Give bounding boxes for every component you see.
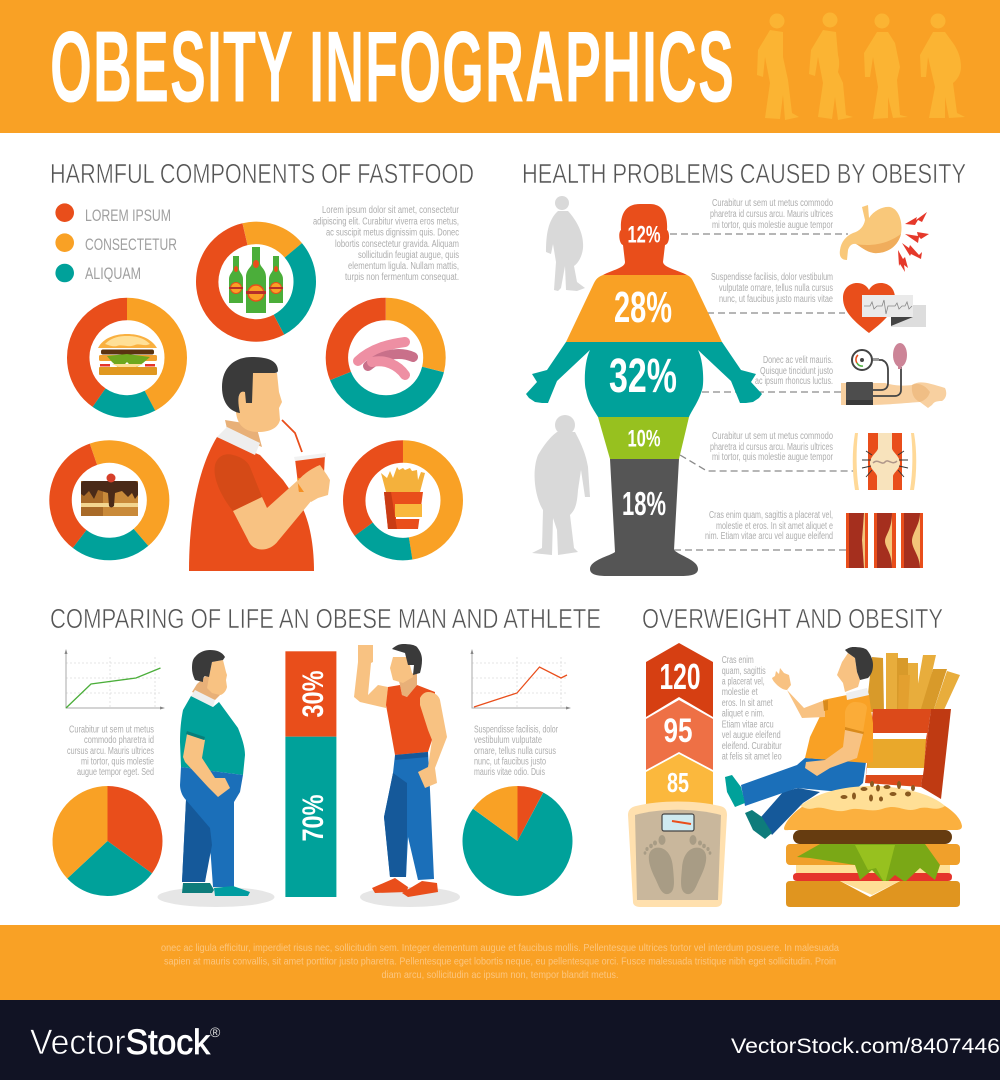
footer band: sapien at mauris convallis, sit amet porttitor justo pharetra. Pellentesque eget lobortis neque, eu pellentesque orci. Fusce malesuada tristique nibh eget sollicitudin. Proin [164,956,836,968]
stacked bar: 30% [297,670,330,718]
icon: sausages [358,342,413,375]
text block: heart: vulputate ornare, tellus nulla cursus [719,283,833,294]
text block: athlete: Suspendisse facilisis, dolor [474,724,558,736]
pie chart: obese man [69,802,146,880]
text block: athlete: mauris vitae odio. Duis [474,767,545,778]
footer band: onec ac ligula efficitur, imperdiet risus nec, sollicitudin sem. Integer elementum augue et faucibus mollis. Pellentesque ultrices tortor vel interdum posuere. In malesuada [161,942,839,954]
text block: athlete: nunc, ut faucibus justo [474,756,546,768]
text block: athlete [474,724,558,778]
text block: turpis non fermentum consequat. [345,272,459,283]
text block: at felis sit amet leo [722,752,782,762]
text block: a placerat vel, [722,676,765,688]
text block: stomach: pharetra id cursus arcu. Mauris ultrices [710,209,833,220]
panel: harmful components of fastfood [41,158,474,571]
header band [0,0,1000,133]
icon: blood pressure [841,343,946,408]
legend: ALIQUAM [85,265,141,283]
icon: bathroom scale [628,802,727,907]
donut chart: beer [187,213,325,350]
icon: beer bottles [229,247,283,313]
text block: ac suscipit metus dignissim quis. Donec [326,228,459,238]
body chart: 10% [628,426,660,452]
weight scale stack: 120 [660,656,700,697]
icon: heart with ecg [843,283,926,333]
icon: cake [81,474,138,516]
pie chart: athlete [479,803,556,879]
icon: arteries [846,513,923,568]
weight scale stack [646,643,713,807]
text block: pressure: Quisque tincidunt justo [760,366,833,377]
text block: obese man: commodo pharetra id [84,735,154,746]
text block: Etiam vitae arcu [722,720,774,730]
figure: obese man [158,650,274,907]
text block: athlete: ornare, tellus nulla cursus [474,746,556,757]
text block: sollicitudin feugiat augue, quis [358,250,459,261]
donut chart: sausages [322,294,449,421]
icon: giant fries [865,653,960,799]
dashed connectors [670,234,854,550]
heading: COMPARING OF LIFE AN OBESE MAN AND ATHLETE [50,603,601,634]
icon: knee joint [853,433,916,490]
footer band: diam arcu, sollicitudin ac ipsum non, tempor blandit metus. [382,969,618,981]
silhouette: small man [546,196,585,291]
text block: quam, sagittis [722,666,766,677]
donut chart: burger [59,290,195,426]
body chart: 18% [622,485,666,522]
text block: heart: nunc, ut faucibus justo mauris vitae [719,294,833,305]
icon: fries [381,467,425,529]
icon: man drinking soda [189,357,330,571]
weight scale stack: 95 [664,712,692,750]
icon: silhouettes gaining weight [757,12,965,120]
text block: joints: pharetra id cursus arcu. Mauris ultrices [710,442,833,453]
text block: eleifend. Curabitur [722,741,782,752]
text block: adipiscing elit. Curabitur viverra eros metus, [313,216,459,228]
text block: pressure: Donec ac velit mauris. [763,355,833,366]
text block: eros. In sit amet [722,698,773,709]
text block: joints: mi tortor, quis molestie augue tempor [712,452,833,463]
text block: elementum ligula. Nullam mattis, [348,261,459,272]
line chart: athlete [470,649,571,710]
text block: obese man: cursus arcu. Mauris ultrices [67,746,154,757]
legend: LOREM IPSUM [85,207,171,225]
donut chart: cake [41,432,178,569]
text block: joints [710,431,833,463]
text block: pressure [755,355,833,387]
logo: VectorStock [30,1023,210,1062]
text block: molestie et [722,687,758,698]
body chart: 32% [609,350,677,403]
panel: overweight and obesity [628,603,962,907]
text block: stomach [710,198,833,231]
heading: HARMFUL COMPONENTS OF FASTFOOD [50,158,474,189]
text block [313,205,460,283]
image id: VectorStock.com/8407446 [731,1035,1000,1058]
stacked bar [285,651,336,897]
icon: burger [98,334,157,375]
body chart [526,204,762,576]
text block: stomach: Curabitur ut sem ut metus commodo [712,198,833,209]
text block: joints: Curabitur ut sem ut metus commodo [712,431,833,442]
figure: athlete [354,644,460,907]
text block: arteries: nim. Etiam vitae arcu vel augue eleifend [705,531,833,542]
text block: obese man: Curabitur ut sem ut metus [69,724,154,736]
text block: Lorem ipsum dolor sit amet, consectetur [322,205,460,216]
panel: comparing life of obese man and athlete [50,603,601,907]
body chart: 12% [628,222,660,248]
icon: stomach [840,205,929,272]
text block [722,655,782,762]
legend [55,203,177,283]
text block: pressure: ac ipsum rhoncus luctus. [755,376,833,387]
silhouette: large man [532,415,590,555]
stacked bar: 70% [297,794,330,842]
legend: CONSECTETUR [85,236,177,254]
text block: obese man [67,724,154,778]
icon: giant burger [784,781,962,907]
line chart: obese man [64,649,165,710]
watermark bar [0,1000,1000,1080]
text block: stomach: mi tortor, quis molestie augue tempor [712,220,833,231]
text block: aliquet e nim. [722,708,765,720]
text block: obese man: augue tempor eget. Sed [77,767,154,778]
body chart: 28% [614,283,672,332]
text block: vel augue eleifend [722,730,781,741]
donut chart: fries [335,432,471,568]
text block: heart [711,272,833,305]
weight scale stack: 85 [667,767,689,798]
text block: arteries: molestie et eros. In sit amet aliquet e [716,521,833,532]
text block: arteries [705,510,833,542]
text block: heart: Suspendisse facilisis, dolor vestibulum [711,272,833,283]
text block: Cras enim [722,655,754,666]
figure: sitting man [725,647,873,839]
text block: athlete: vestibulum vulputate [474,735,542,746]
footer band [0,925,1000,1000]
text block: lobortis consectetur gravida. Aliquam [335,239,459,250]
text block: arteries: Cras enim quam, sagittis a placerat vel, [709,510,833,521]
text block: obese man: mi tortor, quis molestie [81,756,154,768]
panel: health problems caused by obesity [522,158,966,576]
registered mark: ® [210,1024,221,1040]
